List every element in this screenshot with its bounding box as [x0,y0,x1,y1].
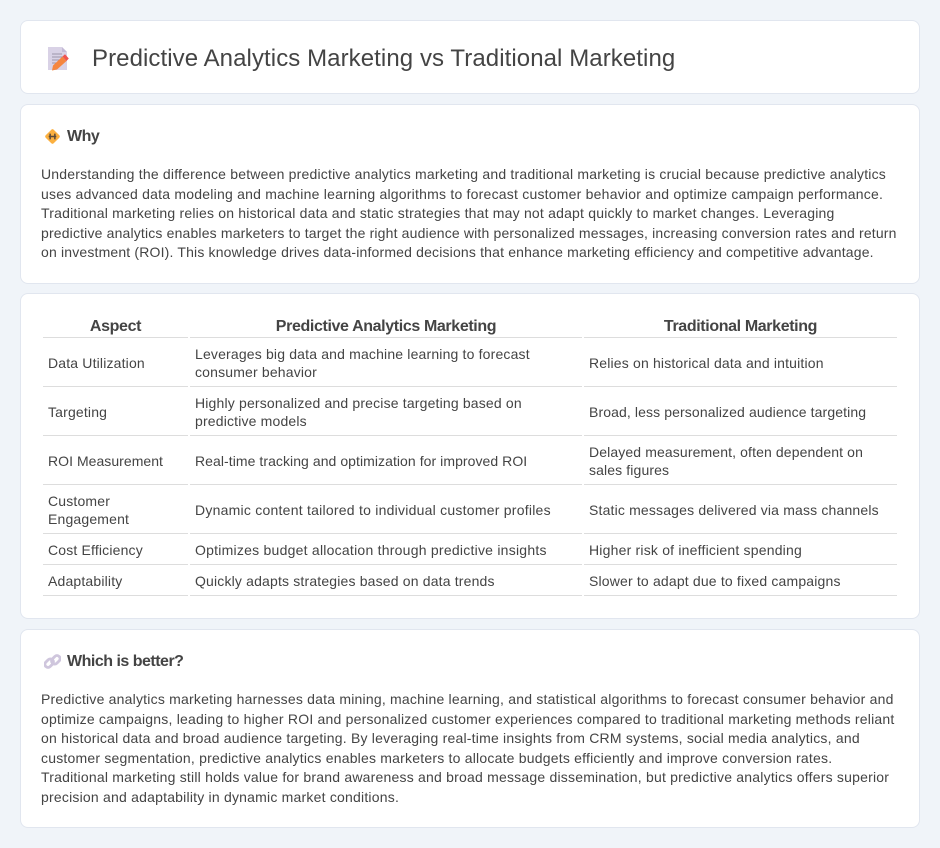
text block: which is better: optimize campaigns, leading to higher ROI and personalized customer experiences compared to traditional marketing methods reliant [41,710,895,726]
panel: which is better [20,629,920,828]
comparison table: Targeting [48,404,107,420]
text block: which is better: Traditional marketing still holds value for brand awareness and broad message dissemination, but predictive analytics offers superior [41,769,889,785]
comparison table: Broad, less personalized audience targeting [589,404,866,420]
icon: chain link [44,654,61,669]
text block: why: uses advanced data modeling and machine learning algorithms to forecast customer behavior and optimize campaign performance. [41,186,883,202]
text block: which is better: Predictive analytics marketing harnesses data mining, machine learning, and statistical algorithms to forecast consumer behavior and [41,691,894,707]
comparison table: Highly personalized and precise targeting based on [195,395,522,411]
comparison table: Quickly adapts strategies based on data trends [195,573,495,589]
text block: why: on investment (ROI). This knowledge drives data-informed decisions that enhance marketing efficiency and competitive advantage. [41,244,874,260]
title: Predictive Analytics Marketing vs Traditional Marketing [92,45,675,72]
comparison table: sales figures [589,462,669,478]
comparison table: Adaptability [48,573,122,589]
text block: which is better [41,691,895,805]
comparison table: Real-time tracking and optimization for improved ROI [195,453,527,469]
comparison table: Dynamic content tailored to individual customer profiles [195,502,551,518]
text block: which is better: on historical data and broad audience targeting. By leveraging real-time insights from CRM systems, social media analytics, and [41,730,860,746]
comparison table: Delayed measurement, often dependent on [589,444,863,460]
text block: why: Traditional marketing relies on historical data and static strategies that may not adapt quickly to market changes. Leveraging [41,205,835,221]
icon: diamond road sign [45,129,60,144]
comparison table: Higher risk of inefficient spending [589,542,802,558]
comparison table: Cost Efficiency [48,542,143,558]
comparison table: Aspect [90,318,141,335]
text block: which is better: precision and adaptability in dynamic market conditions. [41,788,399,804]
comparison table: predictive models [195,413,307,429]
panel: comparison table [20,293,920,619]
heading: which is better: Which is better? [67,653,183,670]
comparison table: Relies on historical data and intuition [589,355,824,371]
comparison table [43,318,897,596]
comparison table: consumer behavior [195,364,317,380]
text block: why [41,166,897,260]
comparison table: Traditional Marketing [664,318,817,335]
panel: why [20,104,920,284]
comparison table: Engagement [48,511,129,527]
panel: title header [20,20,920,94]
comparison table: Slower to adapt due to fixed campaigns [589,573,841,589]
comparison table: Leverages big data and machine learning to forecast [195,346,530,362]
comparison table: Predictive Analytics Marketing [276,318,496,335]
text block: which is better: customer segmentation, predictive analytics enables marketers to allocate budgets efficiently and improve conversion rates. [41,750,832,766]
heading: why: Why [67,128,99,145]
text block: why: Understanding the difference between predictive analytics marketing and traditional marketing is crucial because predictive analytics [41,166,886,182]
comparison table: Customer [48,493,110,509]
text block: why: predictive analytics enables marketers to target the right audience with personalized messages, increasing conversion rates and return [41,224,897,240]
comparison table: Optimizes budget allocation through predictive insights [195,542,547,558]
comparison table: ROI Measurement [48,453,163,469]
comparison table: Static messages delivered via mass channels [589,502,879,518]
comparison table: Data Utilization [48,355,145,371]
icon: document with pencil [48,47,69,70]
